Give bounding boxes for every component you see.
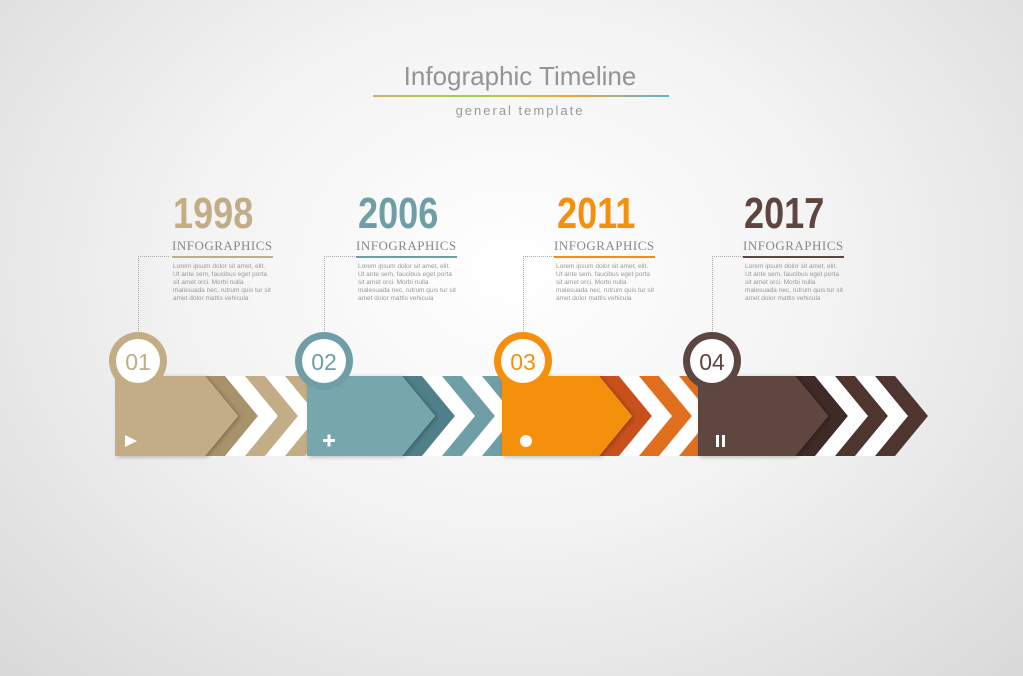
- column 3: Lorem ipsum dolor sit amet, elit. Ut ante sem, faucibus eget porta sit amet orci. Morbi nulla malesuada nec, rutrum quis tur sit amet dolor mattis vehicula: [556, 263, 654, 302]
- icon: play: [125, 435, 137, 447]
- icon: plus: [323, 434, 335, 446]
- column 1: [138, 189, 273, 331]
- segment 1: [115, 376, 338, 456]
- circle 04: 04: [699, 349, 725, 375]
- title underline: [373, 95, 669, 97]
- column 4: INFOGRAPHICS: [743, 238, 844, 253]
- column 2: 2006: [358, 189, 438, 238]
- column 3: [523, 189, 655, 331]
- title: Infographic Timeline: [404, 61, 636, 91]
- circle 03: 03: [510, 349, 536, 375]
- column 1: 1998: [173, 189, 253, 238]
- column 2: [324, 189, 457, 331]
- column 4: Lorem ipsum dolor sit amet, elit. Ut ante sem, faucibus eget porta sit amet orci. Morbi nulla malesuada nec, rutrum quis tur sit amet dolor mattis vehicula: [745, 263, 843, 302]
- subtitle: general template: [456, 103, 584, 118]
- circle 02: 02: [311, 349, 337, 375]
- column 1: Lorem ipsum dolor sit amet, elit. Ut ante sem, faucibus eget porta sit amet orci. Morbi nulla malesuada nec, rutrum quis tur sit amet dolor mattis vehicula: [173, 263, 271, 302]
- icon: pause: [716, 435, 725, 447]
- circle 01: 01: [125, 349, 151, 375]
- segment 2: [307, 376, 535, 456]
- circle 02: [295, 332, 353, 390]
- segment 4: [698, 376, 928, 456]
- column 2: Lorem ipsum dolor sit amet, elit. Ut ante sem, faucibus eget porta sit amet orci. Morbi nulla malesuada nec, rutrum quis tur sit amet dolor mattis vehicula: [358, 263, 456, 302]
- circle 03: [494, 332, 552, 390]
- column 4: [712, 189, 844, 331]
- segment 3: [502, 376, 732, 456]
- column 3: INFOGRAPHICS: [554, 238, 655, 253]
- circle 01: [109, 332, 167, 390]
- column 2: INFOGRAPHICS: [356, 238, 457, 253]
- column 4: 2017: [744, 189, 824, 238]
- circle 04: [683, 332, 741, 390]
- icon: dot: [520, 435, 532, 447]
- column 1: INFOGRAPHICS: [172, 238, 273, 253]
- column 3: 2011: [557, 189, 635, 238]
